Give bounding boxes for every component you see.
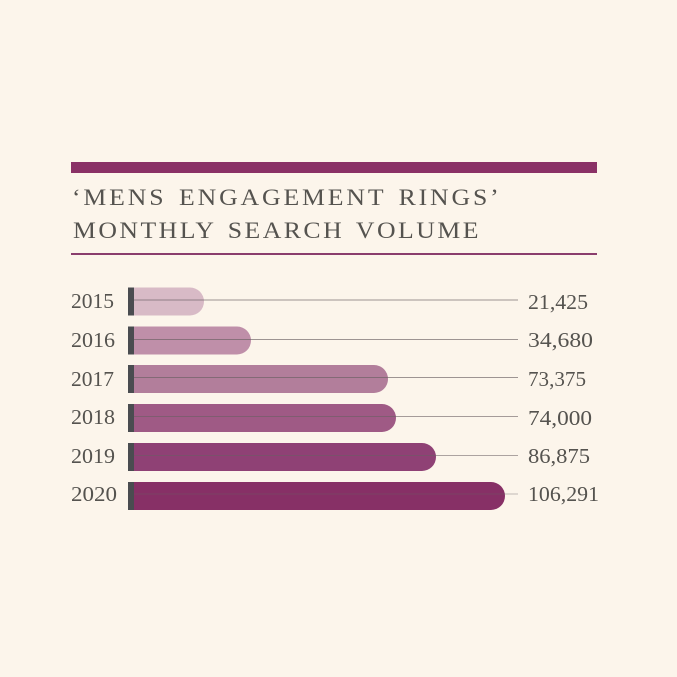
row 2015: 2015	[71, 289, 114, 313]
title: MONTHLY SEARCH VOLUME	[73, 218, 478, 244]
row 2018: 2018	[71, 405, 115, 429]
row 2020: 106,291	[528, 482, 599, 506]
header bar	[71, 162, 597, 173]
title underline	[71, 253, 597, 255]
row 2015: 21,425	[528, 290, 588, 314]
title	[72, 185, 499, 244]
bar chart	[71, 288, 599, 510]
row 2017: 2017	[71, 367, 114, 391]
row 2017: 73,375	[528, 367, 586, 391]
row 2019	[71, 443, 590, 471]
title: ‘MENS ENGAGEMENT RINGS’	[72, 185, 499, 211]
row 2020: 2020	[71, 482, 117, 506]
row 2020	[71, 482, 599, 510]
row 2015	[71, 288, 588, 316]
row 2018: 74,000	[528, 406, 592, 430]
row 2019: 86,875	[528, 444, 590, 468]
row 2019: 2019	[71, 444, 115, 468]
row 2018	[71, 404, 592, 432]
row 2016: 34,680	[528, 328, 593, 352]
row 2017	[71, 365, 586, 393]
row 2016	[71, 326, 593, 354]
row 2016: 2016	[71, 328, 115, 352]
